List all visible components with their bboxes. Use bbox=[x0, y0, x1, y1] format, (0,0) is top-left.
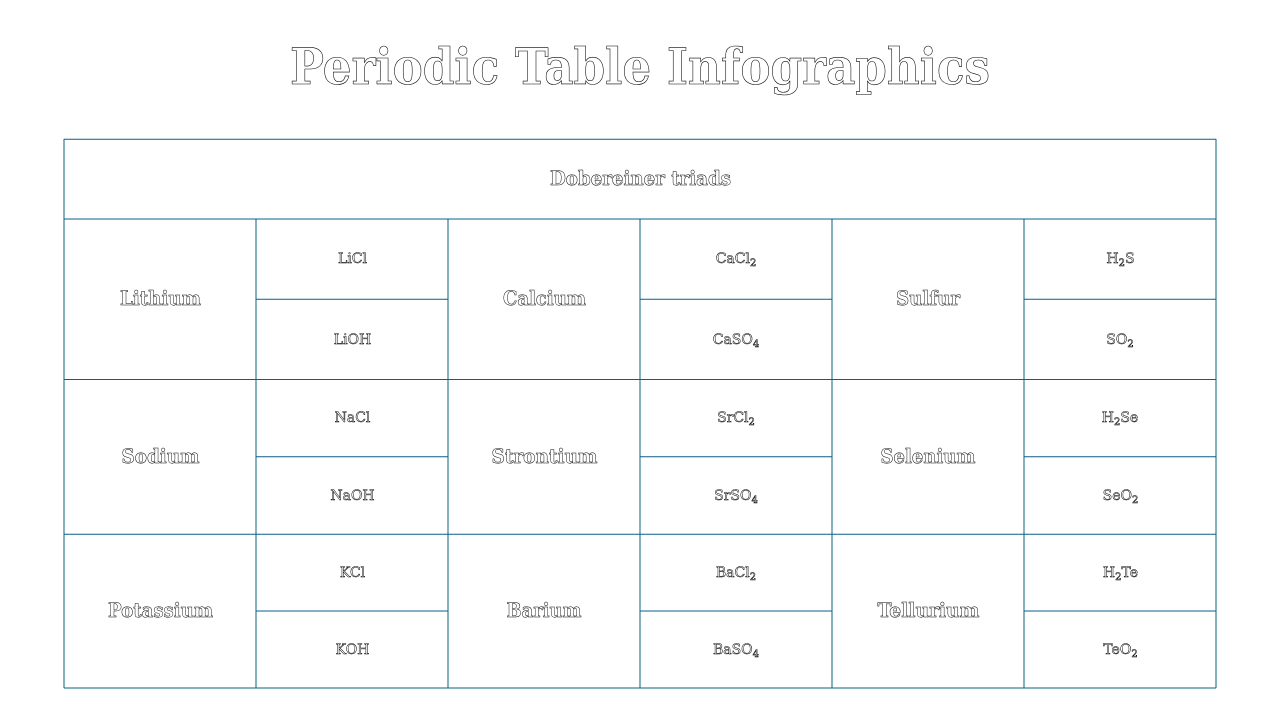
compound: LiCl: LiCl bbox=[338, 251, 368, 267]
compound: SrCl2: 2 bbox=[749, 417, 755, 428]
compound: NaOH: NaOH bbox=[330, 488, 375, 504]
compound: SO2: 2 bbox=[1127, 339, 1134, 350]
compound: H2Se: 2 bbox=[1114, 417, 1120, 428]
compound: H2S: S bbox=[1125, 251, 1135, 267]
compound: CaSO4: 4 bbox=[753, 339, 759, 350]
compound: SrSO4: SrSO bbox=[714, 488, 751, 504]
element: Lithium: Lithium bbox=[120, 286, 201, 310]
element: Sulfur: Sulfur bbox=[896, 286, 960, 310]
compound: LiOH: LiOH bbox=[334, 332, 371, 348]
compound: H2Te: Te bbox=[1122, 565, 1138, 581]
compound: KOH: KOH bbox=[336, 642, 369, 658]
compound: NaCl: NaCl bbox=[335, 410, 371, 426]
compound: CaSO4: CaSO bbox=[713, 332, 753, 348]
row 3: potassium, barium, tellurium triad bbox=[108, 565, 1138, 660]
title: Periodic Table Infographics bbox=[290, 37, 990, 96]
compound: BaCl2: BaCl bbox=[716, 565, 750, 581]
compound: KCl: KCl bbox=[340, 565, 366, 581]
compound: H2S: 2 bbox=[1119, 258, 1125, 269]
element: Selenium: Selenium bbox=[880, 444, 976, 468]
compound: SeO2: SeO bbox=[1103, 488, 1132, 504]
row 2: sodium, strontium, selenium triad bbox=[122, 410, 1138, 506]
element: Barium: Barium bbox=[506, 598, 582, 622]
element: Potassium: Potassium bbox=[108, 598, 213, 622]
compound: TeO2: TeO bbox=[1103, 642, 1131, 658]
panel: table of Dobereiner triads bbox=[64, 139, 1216, 688]
compound: H2Te: 2 bbox=[1115, 572, 1122, 583]
compound: CaCl2: 2 bbox=[750, 258, 756, 269]
compound: H2Se: Se bbox=[1120, 410, 1138, 426]
compound: BaCl2: 2 bbox=[750, 572, 756, 583]
element: Calcium: Calcium bbox=[503, 286, 586, 310]
compound: SeO2: 2 bbox=[1132, 495, 1138, 506]
compound: CaCl2: CaCl bbox=[716, 251, 750, 267]
compound: H2S: H bbox=[1106, 251, 1119, 267]
compound: SrCl2: SrCl bbox=[717, 410, 749, 426]
table heading: Dobereiner triads bbox=[550, 166, 731, 190]
compound: SO2: SO bbox=[1106, 332, 1127, 348]
compound: BaSO4: 4 bbox=[753, 649, 759, 660]
element: Tellurium: Tellurium bbox=[878, 598, 980, 622]
row 1: lithium, calcium, sulfur triad bbox=[120, 251, 1135, 350]
compound: H2Se: H bbox=[1102, 410, 1114, 426]
compound: BaSO4: BaSO bbox=[713, 642, 753, 658]
compound: H2Te: H bbox=[1103, 565, 1115, 581]
compound: SrSO4: 4 bbox=[751, 495, 758, 506]
element: Sodium: Sodium bbox=[122, 444, 200, 468]
compound: TeO2: 2 bbox=[1131, 649, 1138, 660]
element: Strontium: Strontium bbox=[492, 444, 598, 468]
table grid bbox=[64, 139, 1216, 688]
